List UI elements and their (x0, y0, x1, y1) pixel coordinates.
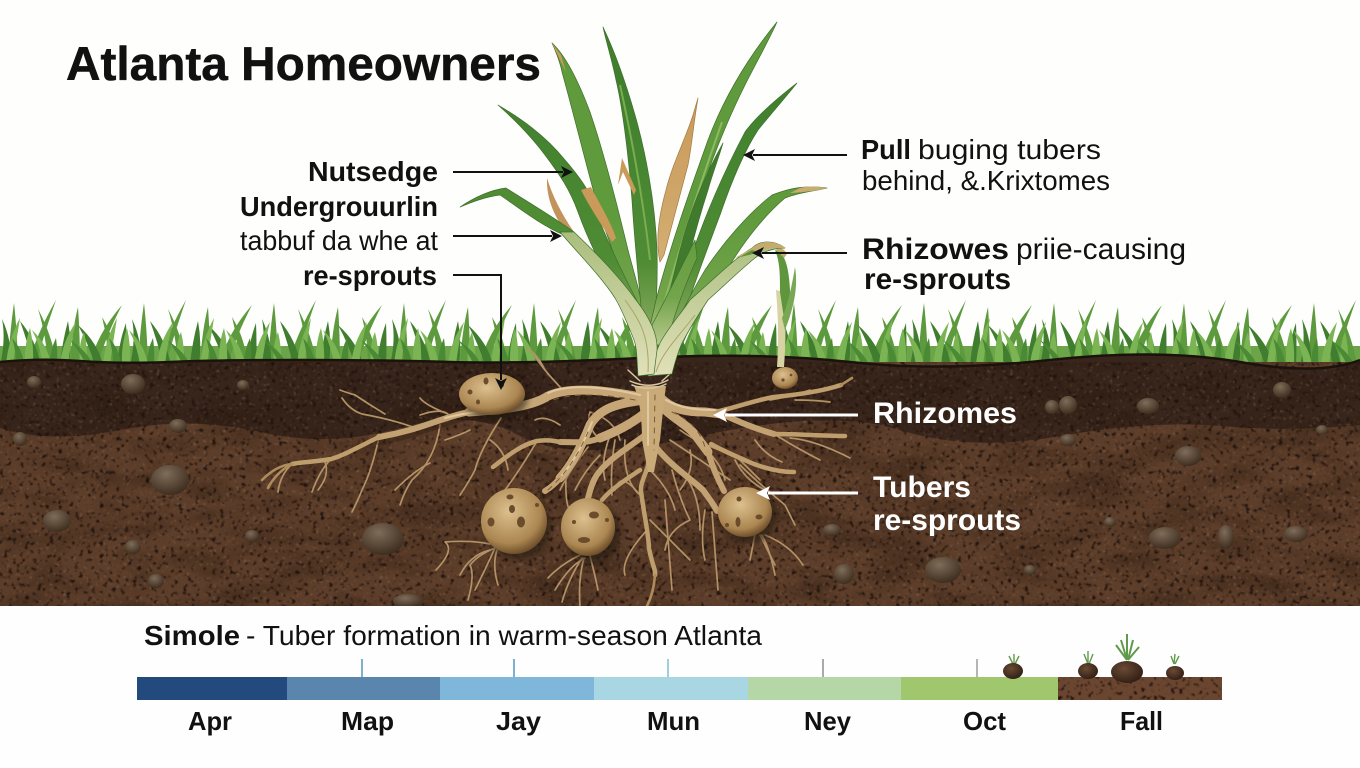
month labels (188, 706, 1163, 736)
tuber shadows (462, 376, 776, 563)
nutsedge plant (460, 22, 827, 376)
month labels: Jay (496, 706, 542, 736)
month labels: Mun (647, 706, 700, 736)
arrow: to rhizomes (725, 414, 858, 416)
leaf: far left dark with tan section (498, 105, 648, 326)
arrows (453, 155, 858, 493)
main rhizomes (469, 390, 722, 478)
label: re-sprouts right: re-sprouts (864, 263, 1011, 296)
leaf: tall back center (603, 27, 657, 330)
label: Pull buging tubers: buging tubers (918, 134, 1101, 165)
large left tuber (481, 488, 547, 554)
soil cross-section (0, 354, 1360, 608)
label: re-sprouts: re-sprouts (303, 260, 437, 291)
sprouting tubers on bar (1003, 634, 1184, 683)
leaf: back left with tan tip (552, 43, 646, 325)
label: Pull buging tubers: Pull (861, 134, 911, 165)
month labels: Ney (804, 706, 852, 736)
leaf: left bent pale sheath (560, 232, 657, 376)
title: Atlanta Homeowners (66, 38, 541, 91)
small tan fold (618, 158, 636, 195)
leaf: inner dark sliver (664, 143, 723, 320)
label block: left (240, 156, 438, 291)
middle tuber (561, 498, 615, 556)
side shoot (775, 248, 796, 367)
label: tabbuf da whe at: tabbuf da whe at (240, 225, 438, 256)
label: Tubers: Tubers (873, 471, 971, 504)
thick root shadow (380, 391, 640, 493)
central taproot (634, 386, 666, 472)
label: Undergrouurlin: Undergrouurlin (240, 191, 438, 222)
rhizome dark texture (548, 395, 706, 490)
right tuber (718, 487, 772, 537)
month labels: Fall (1120, 706, 1163, 736)
leaf: tall back right (648, 22, 777, 335)
plant roots and rhizomes (262, 349, 852, 606)
leaf: center front light (650, 240, 697, 345)
month labels: Map (341, 706, 394, 736)
leaf: right arching with tan tip (668, 187, 827, 345)
bottom panel background (0, 606, 1360, 768)
arrow: to right leaf (753, 154, 847, 156)
grass strip (0, 295, 1360, 366)
month labels: Oct (963, 706, 1006, 736)
rhizome highlights (445, 387, 715, 475)
label: Rhizowes priie-causing: priie-causing (1016, 233, 1186, 266)
month labels: Apr (188, 706, 232, 736)
arrow: to tubers (768, 492, 858, 494)
arrow: to hooked leaf (762, 252, 847, 254)
timeline caption: Simole (144, 620, 240, 651)
label: Rhizowes priie-causing: Rhizowes (862, 233, 1009, 266)
label block: right (861, 134, 1186, 296)
label: re-sprouts white: re-sprouts (873, 504, 1021, 537)
leaf: hooked right with pale sheath (648, 242, 785, 376)
dark upper soil layer (0, 354, 1360, 450)
upper tuber (459, 373, 525, 415)
leaf: tan dead center (658, 98, 698, 262)
leaf: left bent (460, 188, 574, 235)
inner leaf mass behind sheaths (628, 296, 702, 350)
sheath creases (625, 300, 695, 372)
leaf: right dark (668, 83, 797, 328)
tick marks (362, 659, 977, 677)
soil labels (873, 397, 1021, 537)
leaf: tan broken left (547, 178, 574, 234)
timeline panel (0, 606, 1360, 768)
arrow: to left bent leaf (453, 235, 552, 237)
crown binding (628, 370, 672, 388)
label: Rhizomes: Rhizomes (873, 397, 1017, 430)
arrow: to upper tuber (453, 275, 501, 380)
arrow: to left upper leaf (453, 171, 563, 173)
fine rootlets (278, 349, 850, 606)
label: behind Krixtomes: behind, &.Krixtomes (862, 165, 1110, 196)
label: Rhizowes priie-causing (862, 233, 1186, 266)
timeline caption: - Tuber formation in warm-season Atlanta (246, 620, 762, 651)
timeline bar (137, 677, 1222, 700)
small sprouting tuber (772, 367, 798, 389)
label: Nutsedge: Nutsedge (308, 156, 438, 187)
lower soil layer (0, 362, 1360, 606)
tubers (459, 367, 798, 563)
stones (13, 374, 1328, 608)
